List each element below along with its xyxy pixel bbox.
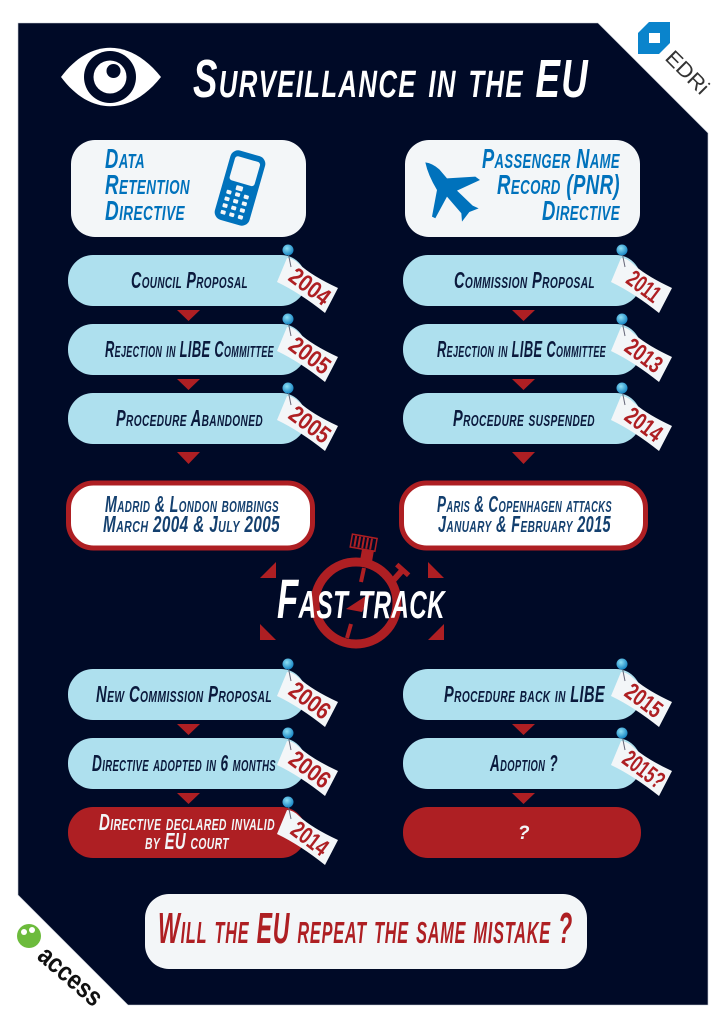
icon: mobile phone (213, 148, 267, 228)
arrow (512, 379, 535, 390)
icon: airplane (425, 162, 480, 222)
step: unknown outcome: ? (518, 823, 530, 844)
panel: PNR header: Passenger Name (482, 143, 620, 174)
arrow (177, 452, 200, 464)
arrow (512, 724, 535, 735)
arrow (512, 310, 535, 321)
event box: Paris and Copenhagen (402, 483, 646, 548)
year tag 2006: 2006 (283, 677, 336, 725)
year tag 2005 (277, 382, 338, 451)
step: new commission proposal (68, 658, 338, 727)
step: adoption (403, 728, 672, 796)
step: rejection in LIBE (68, 314, 338, 382)
step: directive declared invalid: by EU court (145, 828, 229, 854)
event box: Madrid and London: March 2004 & July 2005 (103, 511, 280, 537)
icon: eye (61, 48, 161, 106)
step: commission proposal: Commission Proposal (454, 267, 595, 293)
year tag 2004 (277, 244, 338, 313)
closing question (145, 894, 587, 969)
step: directive declared invalid: Directive declared invalid (99, 809, 275, 835)
step: council proposal: Council Proposal (131, 267, 248, 293)
step: procedure back in LIBE: Procedure back in LIBE (444, 681, 605, 707)
year tag 2006: 2006 (283, 746, 336, 794)
step: council proposal (68, 244, 338, 313)
step: new commission proposal: New Commission Proposal (96, 681, 272, 707)
year tag 2015: 2015 (619, 678, 668, 724)
step: unknown outcome (403, 807, 641, 858)
year tag 2015?: 2015? (617, 745, 670, 795)
corner markers (260, 562, 444, 640)
fast track heading: Fast track (277, 567, 446, 630)
step: directive declared invalid (68, 796, 338, 865)
year tag 2011: 2011 (621, 265, 666, 309)
step: directive adopted: Directive adopted in 6 months (92, 750, 276, 776)
year tag 2005 (277, 314, 338, 382)
year tag 2013: 2013 (619, 333, 668, 379)
step: procedure abandoned (68, 382, 338, 451)
arrow (512, 452, 535, 464)
arrow (177, 793, 200, 804)
panel: PNR header: Directive (542, 195, 620, 226)
EDRi logo: EDRi (660, 46, 713, 99)
step: procedure abandoned: Procedure Abandoned (116, 405, 263, 431)
event box: Paris and Copenhagen: January & February 2015 (438, 511, 611, 537)
year tag 2014: 2014 (285, 816, 334, 862)
year tag 2011 (611, 244, 672, 313)
event box: Madrid and London (68, 483, 312, 548)
year tag 2015? (611, 728, 672, 796)
year tag 2004: 2004 (283, 263, 336, 312)
icon: stopwatch (260, 534, 444, 644)
panel: data retention header: Retention (105, 169, 190, 200)
step: adoption: Adoption ? (489, 750, 558, 776)
year tag 2014 (611, 382, 672, 451)
step: directive adopted (68, 728, 338, 796)
panel: data retention header: Data (105, 143, 145, 174)
arrow (177, 379, 200, 390)
step: procedure suspended: Procedure suspended (453, 405, 595, 431)
year tag 2005: 2005 (283, 332, 336, 380)
access logo: access (32, 940, 109, 1012)
year tag 2014: 2014 (619, 402, 668, 448)
year tag 2013 (611, 314, 672, 382)
panel: data retention header (71, 140, 306, 237)
panel: data retention header: Directive (105, 195, 185, 226)
access logo (17, 924, 109, 1012)
EDRi logo (638, 22, 713, 99)
year tag 2005: 2005 (283, 401, 336, 449)
step: procedure suspended (403, 382, 672, 451)
panel: PNR header: Record (PNR) (497, 169, 620, 200)
year tag 2006 (277, 658, 338, 727)
year tag 2014 (277, 796, 338, 865)
step: rejection in LIBE (403, 314, 672, 382)
step: procedure back in LIBE (403, 658, 672, 727)
year tag 2015 (611, 658, 672, 727)
year tag 2006 (277, 728, 338, 796)
event box: Madrid and London: Madrid & London bombings (105, 491, 279, 517)
arrow (177, 724, 200, 735)
arrow (177, 310, 200, 321)
panel: PNR header (405, 140, 640, 237)
step: commission proposal (403, 244, 672, 313)
step: rejection in LIBE: Rejection in LIBE Committee (105, 336, 274, 362)
arrow (512, 793, 535, 804)
